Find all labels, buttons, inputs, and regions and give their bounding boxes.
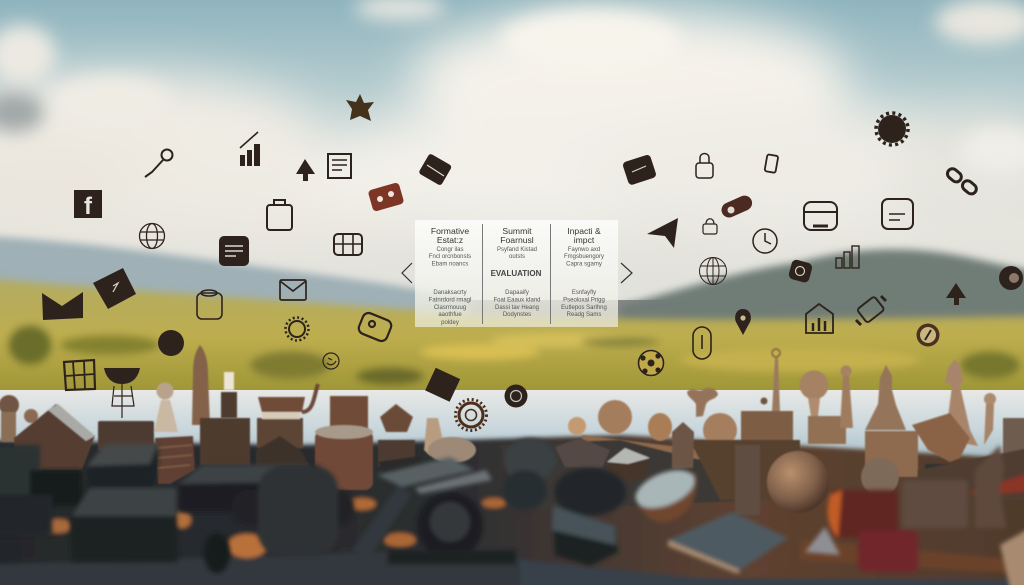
column 3 top: impact: impct xyxy=(574,235,595,245)
icon: clock xyxy=(753,229,777,253)
brown ball on shelf xyxy=(598,400,632,434)
pillar right xyxy=(984,393,996,445)
column 2 bottom list: Foat Eaaux idand xyxy=(493,298,541,304)
shelf xyxy=(582,435,720,460)
column 2 top: summative: Psyfand Kistad xyxy=(497,247,537,253)
foreground box xyxy=(70,488,178,562)
right edge slab xyxy=(1000,520,1024,585)
icon: sun xyxy=(286,318,308,340)
icon: folded dark card xyxy=(622,154,657,186)
icon: dark diamond xyxy=(425,368,460,402)
column 3 top: impact: Inpacti & xyxy=(567,226,601,236)
icon: note card xyxy=(219,236,249,266)
icon: red card xyxy=(368,182,404,212)
front slab xyxy=(552,506,618,566)
textured ball on stem xyxy=(800,370,828,416)
column 1 top: formative xyxy=(429,226,471,268)
icon: chat box xyxy=(882,199,913,229)
gem xyxy=(555,438,610,468)
slate book xyxy=(668,512,788,574)
icon: edge ball xyxy=(999,266,1023,290)
red cylinder xyxy=(828,490,898,538)
icon: outline bars xyxy=(836,246,859,268)
pawn far left xyxy=(0,395,19,442)
icon: cylinder xyxy=(804,202,837,230)
flat machine xyxy=(178,465,320,512)
column 3 top: impact: Faynwo axd xyxy=(568,247,600,253)
icon: rounded tile xyxy=(357,311,393,343)
column 2 top: summative: Summit xyxy=(502,226,532,236)
icon: small smile xyxy=(323,353,339,369)
column 1 bottom list: Danaksacrty xyxy=(433,290,467,296)
icon: grid xyxy=(334,234,362,255)
icon: house chart xyxy=(806,304,833,333)
background row of brown objects xyxy=(0,345,1024,484)
icon: pill xyxy=(719,193,754,220)
background: blurred sky with clouds xyxy=(0,0,1024,300)
icon: small lock xyxy=(703,219,717,234)
icon: jar xyxy=(197,290,222,319)
cut bowl xyxy=(630,463,700,522)
column 3 bottom list xyxy=(561,290,607,318)
small dark cylinder xyxy=(204,533,230,573)
column 3 top: impact xyxy=(564,226,604,268)
clutter band right of centre xyxy=(500,440,760,510)
column 1 top: formative: Formative xyxy=(431,226,469,236)
icon: window grid xyxy=(64,360,95,390)
column 2 bottom list xyxy=(493,290,541,318)
column 2 top: summative: outsts xyxy=(509,254,525,260)
house xyxy=(14,404,95,470)
column 3 bottom list: Esnfayfly xyxy=(572,290,596,296)
column 1 top: formative: Fncl orcnbonsts xyxy=(429,254,471,260)
striped pot xyxy=(155,436,195,484)
column 1 bottom list xyxy=(429,290,471,326)
column 1 top: formative: Estat:z xyxy=(437,235,463,245)
icon: dark dot xyxy=(158,330,184,356)
icon: phone xyxy=(765,154,778,173)
long pen xyxy=(352,486,412,560)
middle row of objects xyxy=(14,404,1024,515)
central translucent evaluation panel xyxy=(415,220,618,327)
dark and wooden table surface xyxy=(0,435,1024,585)
figure dark xyxy=(975,445,1006,528)
icon: rising bars xyxy=(240,132,260,166)
misc light piece xyxy=(805,527,840,555)
beige figures xyxy=(424,418,444,456)
column 2 bottom list: Dassi tav Heang xyxy=(495,305,539,311)
red coil xyxy=(970,468,1024,496)
floating icons left xyxy=(42,94,528,430)
icon: soccer ball xyxy=(638,350,664,376)
crab figure xyxy=(687,388,718,417)
background: pale water band xyxy=(0,390,1024,460)
column 2 top: summative xyxy=(497,226,537,260)
icon: key xyxy=(145,150,172,177)
icon: shopping bag xyxy=(267,200,292,230)
cone piece xyxy=(912,413,970,462)
dark stack left xyxy=(0,445,82,535)
background: yellow field xyxy=(0,278,1024,396)
big pot xyxy=(315,425,373,490)
left chevron arrow xyxy=(402,263,412,283)
icon: dark tag xyxy=(418,153,452,186)
column 3 top: impact: Fmgsbuengory xyxy=(564,254,604,260)
icon: chain xyxy=(945,167,978,196)
right chevron arrow xyxy=(621,263,632,283)
icon: padlock xyxy=(696,154,713,178)
lens xyxy=(417,492,483,558)
column 1 top: formative: Ebam noancs xyxy=(432,262,468,268)
column 1 bottom list: poldey xyxy=(441,320,459,326)
icon: globe right xyxy=(700,258,726,284)
icon: paperclip xyxy=(693,327,711,359)
foreground blurred dark objects xyxy=(0,438,1024,585)
pineapple xyxy=(648,413,672,441)
icon: paper arrow xyxy=(647,218,678,248)
bottle xyxy=(221,372,237,418)
small ball xyxy=(861,458,899,496)
icon: camera badge xyxy=(788,259,813,284)
tall tower xyxy=(192,345,210,425)
column 1 top: formative: Congr ilas xyxy=(436,247,464,253)
tablet xyxy=(377,457,492,494)
icon: coin xyxy=(916,324,940,346)
chess king xyxy=(945,359,978,446)
right box xyxy=(1003,418,1024,454)
icon: document xyxy=(328,154,351,178)
icon: dark gear xyxy=(876,113,908,145)
big brown sphere xyxy=(767,451,829,513)
floating icons right xyxy=(622,113,1023,376)
brown panel xyxy=(330,396,368,430)
column 3 top: impact: Capra sgamy xyxy=(566,262,602,268)
evaluation heading: EVALUATION xyxy=(491,269,542,278)
column 3 bottom list: Readg Sams xyxy=(567,312,601,318)
dark clutter centre xyxy=(503,438,626,516)
panel background xyxy=(415,220,618,327)
small pawn xyxy=(24,409,38,423)
red box xyxy=(858,530,918,572)
icon: folded tag xyxy=(93,268,136,309)
legs xyxy=(735,445,760,515)
box xyxy=(741,411,793,453)
small box xyxy=(808,416,846,444)
column 1 bottom list: Clasrmouug xyxy=(434,305,466,311)
pawn beige xyxy=(154,382,178,432)
round ball xyxy=(703,413,737,447)
brown case xyxy=(98,421,154,451)
chess tower xyxy=(865,365,906,430)
right wood fill xyxy=(918,445,1024,500)
icon: ornate gear xyxy=(456,400,486,430)
icon: facebook: f xyxy=(84,193,93,220)
brown box on pedestal xyxy=(378,404,415,466)
small cylinder xyxy=(672,422,694,468)
icon: up arrow xyxy=(946,283,966,305)
column dividers xyxy=(482,224,550,324)
column 2 bottom list: Dapaaify xyxy=(505,290,529,296)
cube xyxy=(200,418,250,465)
icon: dark envelope xyxy=(42,292,83,320)
icon: envelope xyxy=(280,280,306,300)
dark clutter xyxy=(256,436,310,466)
icon: star xyxy=(346,94,374,121)
icon: up arrow tree xyxy=(296,159,315,181)
column 3 bottom list: Pseoloxal Prigg xyxy=(563,298,605,304)
teapot machine xyxy=(257,384,318,448)
dark box xyxy=(87,444,158,494)
column 2 top: summative: Foarnusl xyxy=(500,235,534,245)
icon: map pin xyxy=(735,309,751,335)
column 3 bottom list: Eutlepos Sarlhng xyxy=(561,305,607,311)
faceted box xyxy=(607,448,650,484)
icon: trophy stand xyxy=(104,368,140,418)
wood box xyxy=(865,431,918,477)
pillar xyxy=(840,366,853,428)
icon: watch xyxy=(856,296,886,325)
background: distant hills xyxy=(0,236,1024,330)
icon: dark round badge xyxy=(504,384,528,408)
carved box xyxy=(902,480,968,528)
icon: facebook xyxy=(74,190,102,220)
column 1 bottom list: Fatnrdord rmagl xyxy=(429,298,471,304)
tower with ring xyxy=(772,349,780,412)
column 2 bottom list: Dodynstes xyxy=(503,312,531,318)
column 1 bottom list: aaothfue xyxy=(438,312,462,318)
barrel xyxy=(232,466,354,556)
icon: globe xyxy=(140,224,164,248)
